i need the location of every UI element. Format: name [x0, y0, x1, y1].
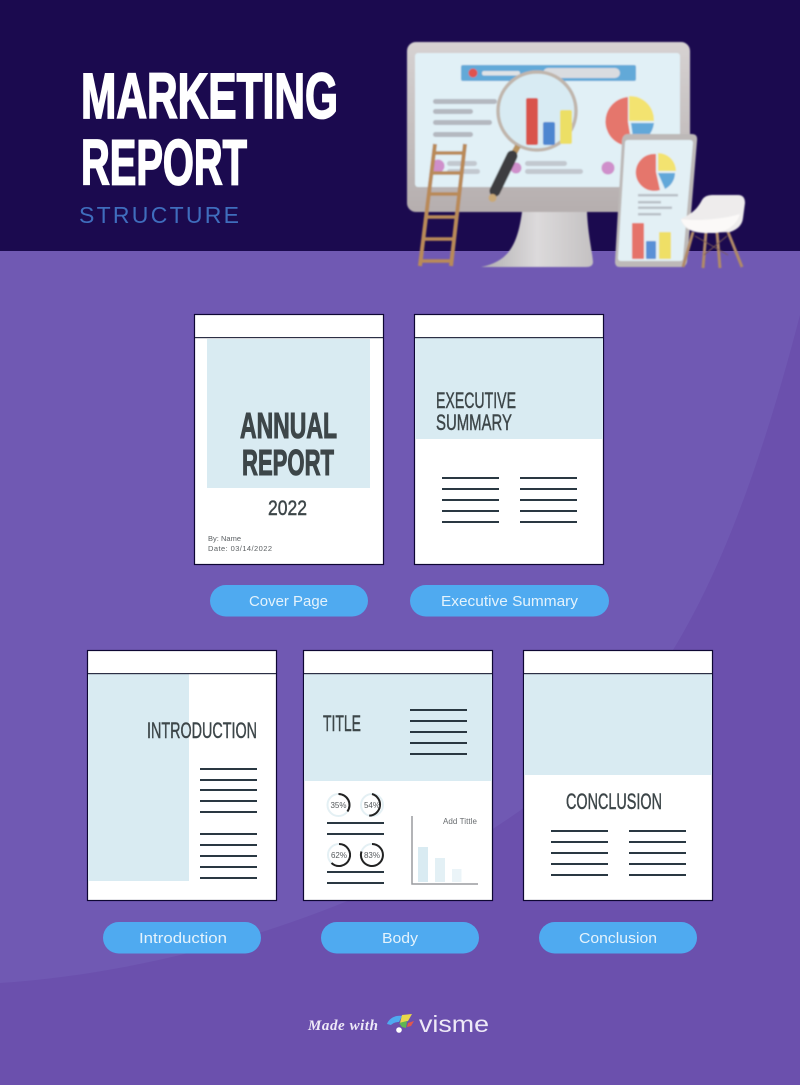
donut 83%: 83%: [364, 851, 380, 860]
title: MARKETING: [81, 60, 338, 132]
donut 54%: 54%: [364, 801, 380, 810]
cover title: ANNUAL: [240, 405, 337, 446]
donut 54%: [361, 794, 383, 816]
cover author: By: Name: [208, 534, 241, 543]
executive text lines: [442, 478, 577, 522]
donut text lines: [327, 823, 384, 883]
pill: executive summary: Executive Summary: [441, 593, 579, 610]
body header line: [304, 673, 492, 674]
illustration: computer, tablet, ladder, chair: [407, 42, 745, 268]
card: conclusion: [524, 650, 712, 900]
executive header line: [415, 337, 603, 338]
donut 35%: 35%: [330, 801, 347, 810]
screen top bar: [461, 65, 636, 81]
pill: cover page: Cover Page: [249, 593, 328, 610]
cover author: [208, 534, 272, 553]
pill: conclusion: Conclusion: [579, 930, 657, 947]
visme wordmark: visme: [419, 1011, 489, 1037]
bar chart: [412, 816, 478, 884]
conclusion text lines: [551, 831, 686, 875]
donut 35%: [328, 794, 350, 816]
card: cover page: [194, 314, 384, 564]
donut 62%: 62%: [331, 851, 347, 860]
executive title: [436, 388, 516, 435]
cover author: Date: 03/14/2022: [208, 544, 272, 553]
background curve: [0, 315, 800, 1085]
pill: body: [321, 922, 479, 954]
pill: cover page: [210, 585, 368, 616]
conclusion title: CONCLUSION: [566, 789, 662, 814]
bar chart: Add Tittle: [443, 817, 478, 826]
body blue block: [304, 674, 492, 781]
conclusion header line: [524, 673, 712, 674]
cover title: [240, 405, 337, 483]
introduction text lines: [200, 769, 257, 878]
ladder: [420, 144, 465, 266]
introduction header line: [88, 673, 276, 674]
magnifier bars: [498, 72, 576, 150]
donut 83%: [361, 844, 383, 866]
title: [81, 60, 338, 198]
icon: visme logo: [387, 1014, 414, 1033]
chair: [681, 195, 745, 268]
monitor screen: [415, 53, 680, 187]
card: executive summary: [414, 314, 604, 564]
card: body: [304, 650, 492, 900]
title: REPORT: [81, 126, 247, 198]
executive blue block: [415, 338, 603, 439]
cover year: 2022: [268, 497, 307, 520]
magnifier handle: [488, 146, 518, 202]
pill: executive summary: [410, 585, 609, 616]
conclusion blue block: [524, 674, 712, 775]
cover title: REPORT: [242, 442, 334, 483]
screen pie chart: [605, 96, 654, 146]
tablet: [615, 134, 697, 267]
pill: introduction: [103, 922, 261, 954]
made with text: Made with: [307, 1018, 378, 1034]
monitor stand: [481, 212, 593, 267]
card: introduction: [88, 650, 276, 900]
introduction blue block: [88, 674, 189, 881]
screen text lines: [433, 99, 583, 174]
pill: conclusion: [539, 922, 697, 954]
pill: introduction: Introduction: [139, 930, 227, 947]
executive title: EXECUTIVE: [436, 388, 516, 413]
footer: made with visme: [307, 1011, 489, 1037]
body title: TITLE: [323, 711, 361, 736]
body text lines: [410, 710, 467, 754]
introduction title: INTRODUCTION: [147, 718, 257, 743]
header band: [0, 0, 800, 251]
pill: body: Body: [382, 930, 419, 947]
screen dots: [432, 160, 614, 174]
monitor body: [407, 42, 690, 212]
donut 62%: [328, 844, 350, 866]
cover blue block: [207, 339, 370, 488]
cover header line: [195, 337, 383, 338]
subtitle: STRUCTURE: [79, 202, 239, 228]
executive title: SUMMARY: [436, 410, 512, 435]
